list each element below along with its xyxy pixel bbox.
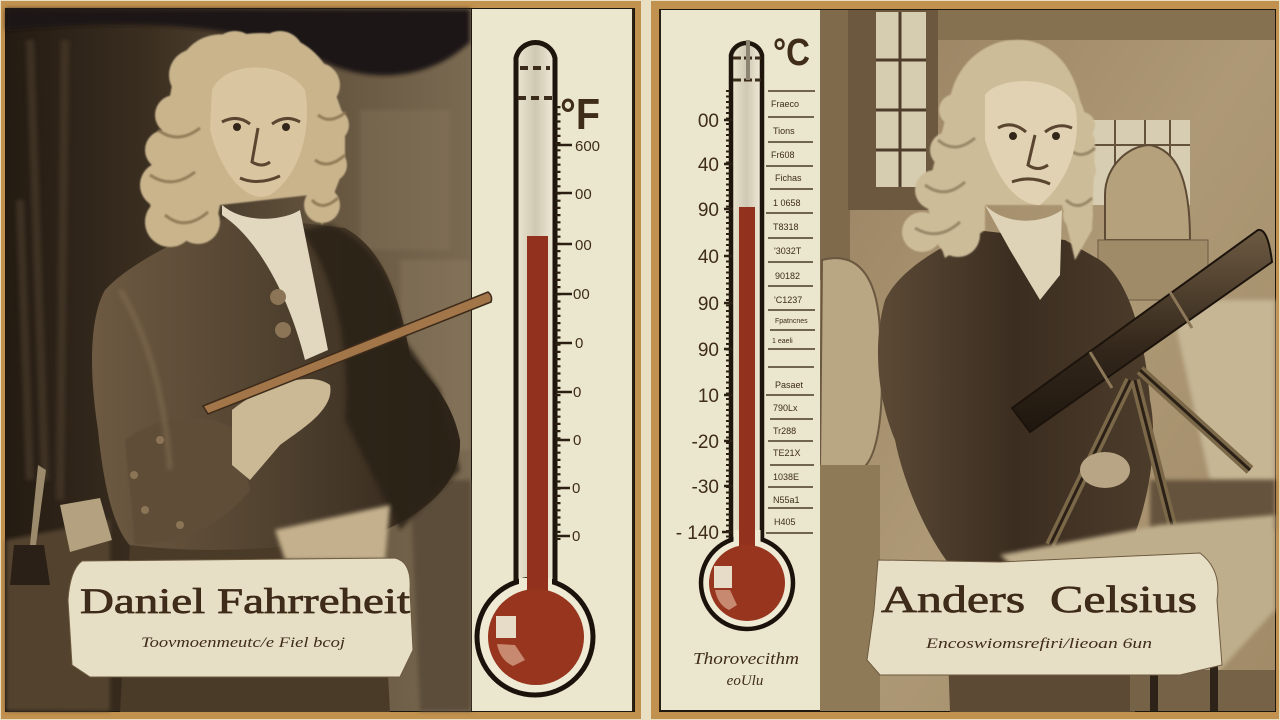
panel: Fahrenheit: [1, 1, 641, 719]
reference table: N55a1: [773, 495, 800, 505]
thermometer strip: Fahrenheit: [472, 9, 634, 711]
reference table: Fichas: [775, 173, 802, 183]
label: Anders Celsius: Encoswiomsrefiri/lieoan 6un: [925, 636, 1152, 652]
scale labels: 90: [698, 294, 719, 315]
portrait background: [820, 10, 1275, 711]
coat: [878, 230, 1153, 579]
reference table: 790Lx: [773, 403, 798, 413]
wig: [140, 31, 349, 247]
scale labels: 00: [575, 186, 592, 203]
scale labels: 0: [572, 480, 580, 497]
scale labels: 0: [573, 432, 581, 449]
scale labels: 10: [698, 386, 719, 407]
label: Daniel Fahrenheit: Daniel Fahrreheit: [80, 581, 410, 621]
scale labels: [572, 138, 600, 545]
label: Anders Celsius: [867, 553, 1222, 675]
scale labels: 00: [698, 111, 719, 132]
scale labels: [676, 111, 719, 544]
reference table: 'C1237: [774, 295, 802, 305]
thermometer tube and bulb: [477, 42, 593, 695]
reference table: Fraeco: [771, 99, 799, 109]
reference table: 1 eaeli: [772, 338, 793, 345]
tick scale: [722, 90, 733, 540]
label: Anders Celsius: Anders Celsius: [881, 579, 1197, 621]
icon: inkwell and quill: [10, 465, 112, 585]
unit: degrees C: °C: [773, 32, 810, 74]
hand: [1080, 452, 1130, 488]
reference table: Pasaet: [775, 380, 804, 390]
reference table: H405: [774, 517, 796, 527]
thermometer strip: Celsius: [659, 9, 820, 711]
scale labels: 0: [572, 528, 580, 545]
reference table: Fpatncnes: [775, 318, 808, 325]
telescope: [1012, 230, 1272, 432]
tripod: [1050, 370, 1250, 545]
reference table: '3032T: [774, 246, 802, 256]
scale labels: 00: [573, 286, 590, 303]
label: Daniel Fahrenheit: [68, 558, 413, 677]
figure: Anders Celsius: [878, 40, 1275, 712]
figure: Daniel Fahrenheit: [92, 31, 460, 712]
reference table: 1038E: [773, 472, 799, 482]
unit: degrees F: °F: [560, 90, 600, 139]
face: [985, 81, 1077, 205]
reference table: T8318: [773, 222, 799, 232]
pointer stick: [203, 292, 492, 414]
cravat: [222, 205, 328, 360]
coat: [92, 215, 460, 558]
reference table: [766, 91, 815, 533]
scale labels: 90: [698, 200, 719, 221]
scale labels: -30: [692, 477, 719, 498]
scale labels: 0: [575, 335, 583, 352]
reference table: 1 0658: [773, 198, 801, 208]
cuff and hand: [232, 379, 330, 480]
thermometer tube and bulb: [701, 40, 793, 629]
portrait background: [6, 9, 471, 711]
panel: Celsius: [651, 1, 1279, 719]
scale labels: 0: [573, 384, 581, 401]
buttons: [130, 289, 291, 529]
tick scale: [556, 106, 572, 540]
reference table: Fr608: [771, 150, 795, 160]
desk and map: [1000, 515, 1275, 670]
cravat: [985, 205, 1062, 300]
reference table: Tr288: [773, 426, 796, 436]
scale labels: 600: [575, 138, 600, 155]
scale labels: 40: [698, 155, 719, 176]
scale labels: - 140: [676, 523, 719, 544]
scale labels: 00: [575, 237, 592, 254]
reference table: TE21X: [773, 448, 801, 458]
caption: Thorovecithm: [693, 649, 799, 668]
face: [210, 68, 307, 197]
wig: [902, 40, 1096, 260]
label: Daniel Fahrenheit: Toovmoenmeutc/e Fiel bcoj: [141, 635, 345, 651]
thermometer strip: Celsius: eoUlu: [727, 673, 763, 689]
scale labels: 90: [698, 340, 719, 361]
reference table: 90182: [775, 271, 800, 281]
scale labels: -20: [692, 432, 719, 453]
reference table: Tions: [773, 126, 795, 136]
scale labels: 40: [698, 247, 719, 268]
